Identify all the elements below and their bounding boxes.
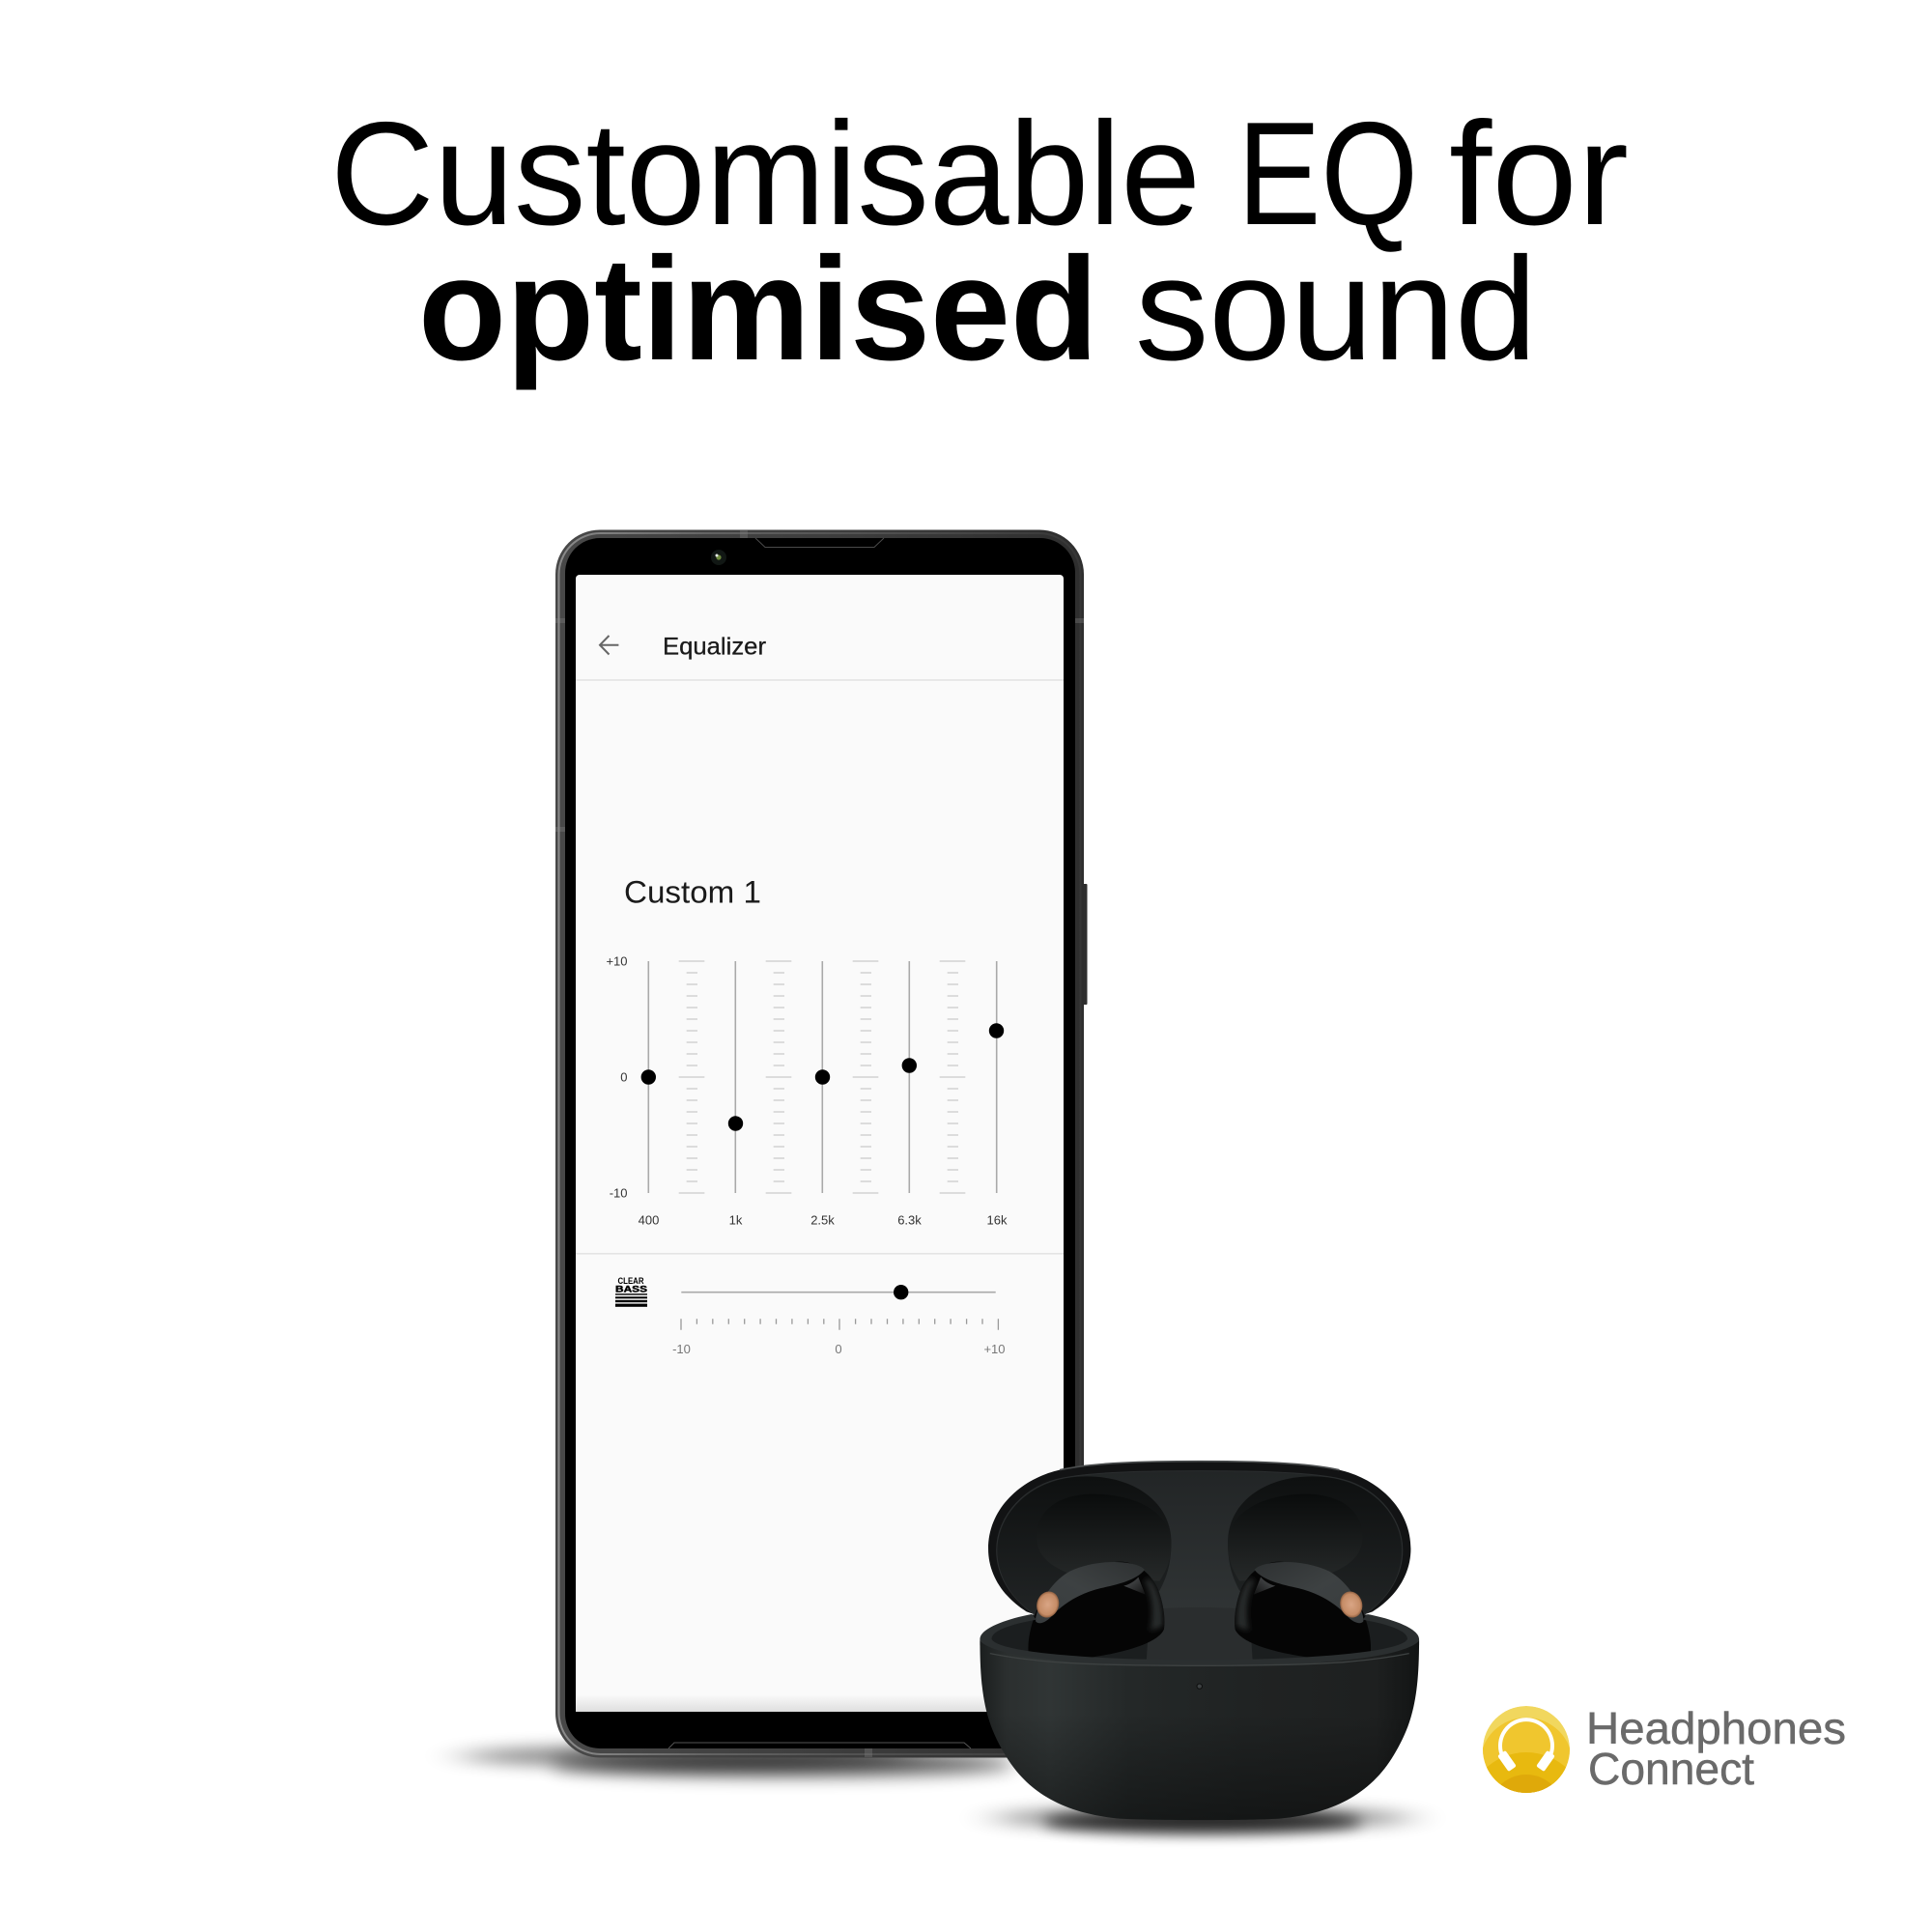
phone side button (1083, 884, 1088, 1005)
title line 2: optimised (418, 227, 1098, 391)
icon: clear bass logo (615, 1276, 647, 1307)
tick marks (679, 961, 965, 1193)
app bar divider (576, 679, 1064, 681)
frequency labels: 400 (639, 1213, 659, 1227)
logo wordmark: Headphones (1586, 1703, 1846, 1753)
left lid cup (997, 1476, 1171, 1620)
case interior (986, 1607, 1412, 1663)
clear bass slider (672, 1285, 1006, 1356)
title line 2 (418, 227, 1537, 391)
preset name: Custom 1 (624, 875, 761, 910)
case body (980, 1640, 1419, 1820)
scale labels: +10 (606, 954, 628, 968)
right lid cup (1228, 1476, 1402, 1620)
frequency labels: 6.3k (897, 1213, 922, 1227)
scale labels (606, 954, 628, 1200)
case rim (980, 1614, 1419, 1668)
equalizer chart (606, 954, 1008, 1227)
slider labels: +10 (983, 1342, 1006, 1356)
phone shadow (461, 1745, 1014, 1776)
slider knob (894, 1285, 908, 1299)
title line 1: for (1449, 92, 1629, 256)
frequency labels: 2.5k (810, 1213, 835, 1227)
title (330, 92, 1629, 391)
phone frame (555, 529, 1084, 1758)
headphones connect logo (1483, 1706, 1845, 1793)
app icon (1483, 1706, 1570, 1793)
title line 1: Customisable (330, 92, 1201, 256)
slider labels (672, 1342, 1006, 1356)
scale labels: 0 (620, 1070, 628, 1084)
phone bezel (565, 538, 1075, 1748)
title line 1 (330, 92, 1629, 256)
title line 1: EQ (1237, 92, 1418, 256)
frequency labels (639, 1213, 1008, 1227)
title line 2: sound (1135, 227, 1537, 391)
right earbud (1235, 1562, 1371, 1660)
frame highlight (558, 533, 1080, 1754)
antenna bands (555, 530, 1084, 1757)
top speaker notch (755, 538, 884, 547)
slider ticks (681, 1319, 998, 1330)
phone (555, 529, 1088, 1758)
case lid (988, 1462, 1410, 1633)
scale labels: -10 (610, 1186, 628, 1200)
frequency labels: 16k (987, 1213, 1008, 1227)
icon: clear bass logo: BASS (615, 1285, 647, 1294)
case LED (1197, 1684, 1202, 1689)
left earbud (1028, 1562, 1164, 1660)
earbuds case shadow (995, 1806, 1410, 1833)
logo wordmark: Connect (1588, 1744, 1754, 1794)
icon: back arrow (600, 636, 618, 655)
slider knobs (641, 1023, 1004, 1131)
phone screen (576, 575, 1064, 1712)
section divider (576, 1253, 1064, 1255)
logo wordmark (1586, 1703, 1846, 1794)
camera (711, 550, 726, 565)
slider labels: 0 (835, 1342, 842, 1356)
screen heading: Equalizer (663, 634, 766, 661)
slider track (681, 1292, 996, 1293)
slider labels: -10 (672, 1342, 691, 1356)
bottom notch (668, 1743, 971, 1748)
icon: clear bass logo: CLEAR (618, 1276, 644, 1286)
slider tracks (648, 961, 997, 1193)
earbuds in charging case (980, 1462, 1419, 1820)
frequency labels: 1k (729, 1213, 743, 1227)
